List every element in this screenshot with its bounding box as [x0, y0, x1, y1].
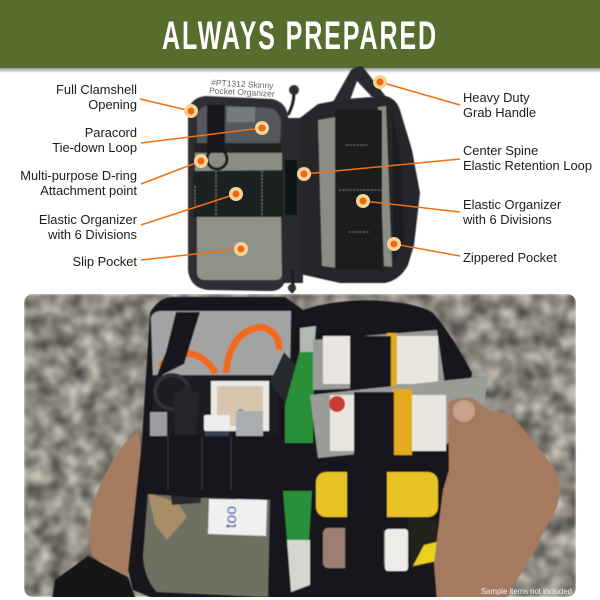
product caption	[209, 77, 276, 99]
rolled bandage 2	[310, 376, 488, 458]
callout: center spine retention loop	[297, 143, 592, 181]
callout: d-ring attachment point	[20, 154, 208, 198]
callout: full clamshell opening: Full Clamshell	[56, 82, 137, 97]
callout: paracord tie-down loop: Tie-down Loop	[52, 140, 137, 155]
callout: left elastic organizer	[39, 187, 243, 242]
product caption: #PT1312 Skinny	[211, 77, 274, 91]
green packet	[283, 326, 316, 592]
yellow tube	[315, 471, 439, 518]
callout: full clamshell opening: Opening	[88, 97, 137, 112]
pill bottle and survival card	[322, 518, 438, 572]
callout: slip pocket: Slip Pocket	[72, 254, 137, 269]
callout: d-ring attachment point: Multi-purpose D-ring	[20, 168, 137, 183]
carabiner and tools	[148, 312, 203, 540]
callout: d-ring attachment point: Attachment point	[40, 183, 137, 198]
headlamp light	[270, 352, 298, 402]
rolled bandage 1	[313, 330, 445, 390]
callout: heavy duty grab handle: Heavy Duty	[463, 90, 530, 105]
callout: zippered pocket: Zippered Pocket	[463, 250, 557, 265]
photo panel: hands holding packed pouch	[24, 294, 576, 600]
callout: paracord tie-down loop	[52, 121, 269, 155]
callout: zippered pocket	[387, 237, 557, 265]
left elastic band	[144, 436, 273, 500]
title: ALWAYS PREPARED	[162, 14, 438, 58]
bandage card	[211, 381, 269, 431]
photo subject	[52, 297, 560, 600]
pouch body	[128, 297, 472, 600]
callout: right elastic organizer: with 6 Divisions	[462, 212, 552, 227]
bandage card: E	[238, 408, 244, 418]
open pouch product image	[188, 66, 420, 293]
left pocket lining	[143, 311, 291, 597]
right hand	[434, 398, 560, 600]
grab handle	[333, 66, 390, 102]
title banner	[0, 0, 600, 73]
callout: right elastic organizer: Elastic Organizer	[463, 197, 562, 212]
callout: center spine retention loop: Center Spine	[463, 143, 538, 158]
spine and cords	[283, 85, 303, 293]
small bottles	[203, 411, 263, 504]
product caption: Pocket Organizer	[209, 85, 275, 99]
callout: right elastic organizer	[356, 194, 562, 227]
tool box card	[208, 499, 267, 536]
callout: full clamshell opening	[56, 82, 198, 118]
callout: left elastic organizer: Elastic Organizer	[39, 212, 138, 227]
callout: slip pocket	[72, 242, 248, 269]
left pouch panel	[188, 96, 288, 291]
pebble background	[24, 294, 576, 597]
orange scissors	[160, 327, 279, 373]
callout: paracord tie-down loop: Paracord	[85, 125, 137, 140]
callout: heavy duty grab handle: Grab Handle	[463, 105, 536, 120]
thumb nail	[453, 400, 475, 422]
left hand	[89, 431, 145, 577]
callout: left elastic organizer: with 6 Divisions	[47, 227, 137, 242]
callout: center spine retention loop: Elastic Retention Loop	[463, 158, 592, 173]
tool box card: too	[223, 506, 240, 528]
callout: heavy duty grab handle	[373, 75, 536, 120]
sleeve	[52, 556, 136, 600]
right pouch panel	[300, 96, 420, 283]
sample note: Sample items not included	[481, 586, 572, 596]
